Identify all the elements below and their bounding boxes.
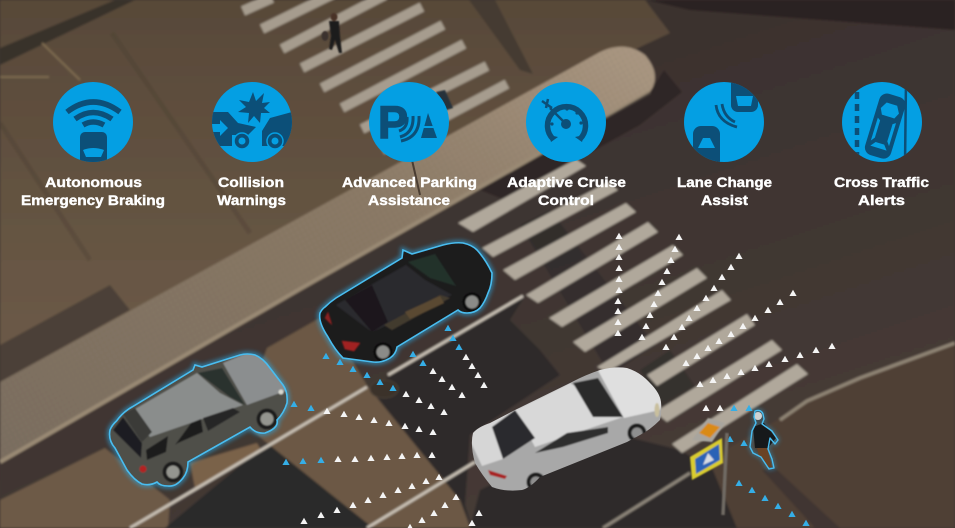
upper left pavement — [0, 0, 670, 390]
dark asphalt zones — [165, 443, 373, 528]
pedestrian top crossing — [322, 13, 342, 53]
crossing sign — [690, 438, 723, 480]
pedestrian outline glow — [750, 410, 778, 469]
brown patch under SUV — [190, 443, 262, 488]
road lines — [130, 296, 690, 528]
label: collision warnings: Collision — [218, 174, 284, 190]
top crosswalk stripes — [243, 0, 507, 150]
white sensing triangles — [300, 233, 836, 528]
pedestrian with sensor outline — [750, 410, 778, 469]
sedan outline glow — [320, 243, 492, 362]
SUV body — [110, 354, 286, 486]
label: adaptive cruise control: Adaptive Cruise — [507, 174, 626, 190]
SUV outline glow — [110, 354, 287, 486]
label: adaptive cruise control: Control — [538, 192, 594, 208]
black sedan with sensor outline — [310, 235, 500, 370]
SUV outline — [110, 354, 287, 486]
brown paving strip — [240, 315, 470, 528]
icon: autonomous emergency braking — [53, 82, 133, 168]
pedestrian body — [753, 412, 776, 467]
feature icons row — [53, 82, 922, 162]
silver SUV with sensor outline — [100, 345, 295, 495]
label: cross traffic alerts: Cross Traffic — [834, 174, 929, 190]
tiled sidewalk band — [0, 47, 655, 462]
label: advanced parking assistance: Advanced Parking — [342, 174, 477, 190]
white sedan — [472, 367, 662, 491]
sedan outline — [320, 243, 492, 362]
icon: adaptive cruise control — [526, 82, 606, 162]
direction arrow markers — [282, 233, 836, 528]
blue sensing triangles — [282, 325, 810, 526]
road sign post — [690, 418, 727, 515]
main crosswalk stripes — [458, 159, 808, 453]
sedan body — [320, 244, 492, 362]
sign post shadow behind parking icon — [412, 160, 420, 195]
label: autonomous emergency braking: Autonomous — [45, 174, 142, 190]
icon: collision warnings — [210, 82, 292, 162]
lower left pavement — [0, 448, 170, 528]
icon: lane change assist — [684, 82, 764, 162]
crosswalk shade — [520, 210, 655, 375]
pedestrian behind parking icon — [436, 90, 453, 110]
lower right pavement — [713, 344, 955, 528]
label: advanced parking assistance: Assistance — [368, 192, 450, 208]
label: lane change assist: Lane Change — [677, 174, 772, 190]
feature labels — [21, 174, 929, 208]
icon: advanced parking assistance — [369, 82, 449, 162]
label: collision warnings: Warnings — [217, 192, 286, 208]
label: cross traffic alerts: Alerts — [858, 192, 905, 208]
label: lane change assist: Assist — [701, 192, 748, 208]
icon: advanced parking assistance: P — [378, 97, 408, 148]
label: autonomous emergency braking: Emergency Braking — [21, 192, 165, 208]
diamond priority sign — [692, 418, 725, 442]
pedestrian outline — [750, 410, 778, 469]
icon: cross traffic alerts — [842, 80, 922, 165]
